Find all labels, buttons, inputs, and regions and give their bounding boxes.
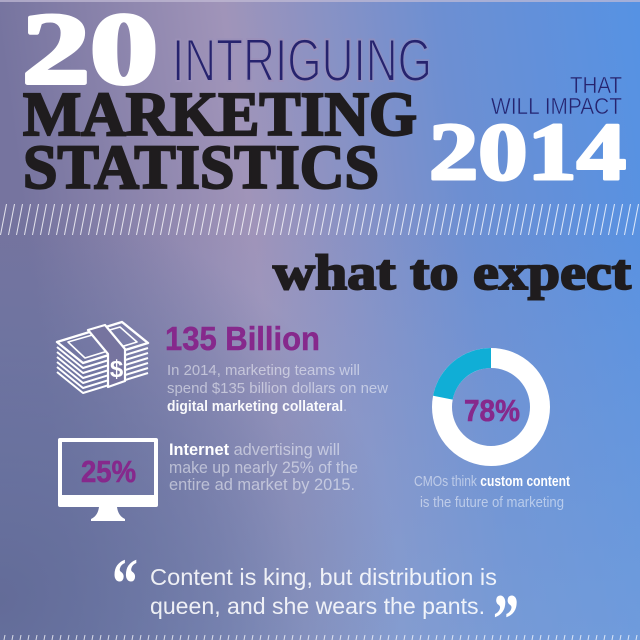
- subtitle: that will impact 2014: [429, 72, 626, 197]
- stat: 135 billion: [57, 320, 388, 415]
- heading: what to expect: what to expect: [273, 244, 631, 300]
- description: [169, 440, 358, 494]
- text: that: THAT: [570, 72, 622, 98]
- icon: monitor: [58, 438, 158, 521]
- word: marketing: MARKETING: [23, 81, 417, 149]
- stat: 78 percent donut chart: [414, 348, 570, 511]
- description: Internet advertising will: [169, 440, 340, 459]
- description: make up nearly 25% of the: [169, 458, 358, 477]
- year 2014: 2014: [429, 106, 626, 197]
- quote text: Content is king, but distribution is: [150, 564, 497, 590]
- icon: stack of money: [57, 322, 148, 393]
- caption: CMOs think custom content: [414, 473, 570, 490]
- caption: [414, 473, 570, 511]
- caption: is the future of marketing: [420, 494, 564, 511]
- figure: 25%: 25%: [81, 454, 136, 489]
- dollar sign: $: [110, 356, 124, 383]
- title: 20 intriguing marketing statistics: [22, 0, 432, 202]
- quote text: [150, 564, 497, 619]
- description: In 2014, marketing teams will: [167, 362, 360, 379]
- description: digital marketing collateral.: [167, 398, 347, 415]
- quote: [112, 543, 519, 640]
- bottom tick band: [0, 635, 640, 640]
- diagonal stripe band: [0, 204, 640, 235]
- donut chart: [433, 348, 540, 456]
- text: will impact: WILL IMPACT: [491, 93, 622, 119]
- figure: 135 billion: 135 Billion: [165, 320, 320, 357]
- word: statistics: STATISTICS: [23, 134, 379, 202]
- quote text: queen, and she wears the pants.: [150, 593, 485, 619]
- word: intriguing: INTRIGUING: [172, 27, 432, 94]
- stat: 25 percent internet advertising: [58, 438, 358, 521]
- description: entire ad market by 2015.: [169, 475, 355, 494]
- icon: opening quotation mark: “: [112, 543, 138, 624]
- description: spend $135 billion dollars on new: [167, 380, 388, 397]
- figure: 78%: 78%: [464, 393, 520, 428]
- description: [167, 362, 388, 415]
